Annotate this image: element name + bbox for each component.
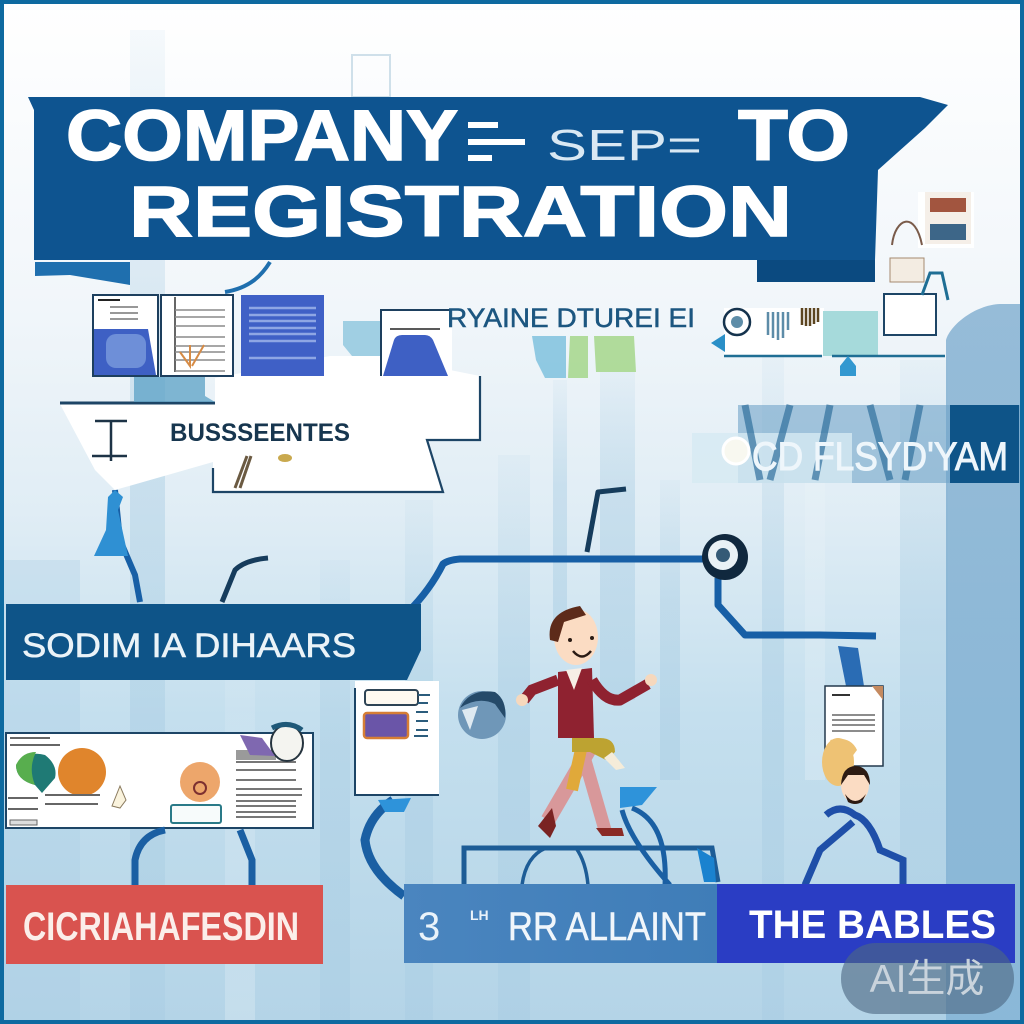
connectors below report — [135, 830, 252, 885]
panel: top right charts — [711, 273, 948, 376]
icon: folder card — [381, 310, 452, 376]
icon: small leaf — [278, 454, 292, 462]
icon: magnifier — [723, 438, 749, 464]
text lines — [236, 762, 302, 817]
legs — [548, 748, 590, 820]
icon: blue badge head — [458, 691, 506, 739]
connector: to document — [838, 646, 864, 686]
box: red — [6, 885, 323, 964]
icon: paper — [112, 786, 126, 808]
watermark text: AI生成 — [870, 958, 984, 1001]
arms — [524, 680, 558, 700]
title: first line: COMPANY — [66, 97, 458, 176]
right building silhouette — [946, 304, 1024, 1024]
sodim label: SODIM IA DIHAARS — [22, 627, 356, 665]
connector: up to business — [94, 490, 140, 602]
smile — [573, 651, 591, 656]
number three: 3 — [418, 905, 440, 949]
head — [554, 609, 598, 665]
watermark badge — [841, 943, 1014, 1014]
title dash — [468, 125, 525, 158]
panel: report left — [6, 724, 313, 828]
banner: mid-right — [692, 405, 1020, 483]
icon: person node — [180, 762, 220, 802]
icon: gauge node — [702, 534, 748, 580]
eyes — [568, 638, 572, 642]
icon: cyan and green bars — [532, 336, 636, 378]
box: royal blue — [717, 884, 1015, 963]
jacket — [558, 668, 594, 738]
character: walking man — [516, 606, 657, 838]
hatch marks — [768, 312, 788, 340]
process flow line — [408, 489, 876, 636]
connector: to bottom middle — [365, 798, 411, 896]
panel: small document — [355, 681, 439, 795]
shoes — [538, 808, 556, 838]
icon: green bubble — [16, 754, 56, 793]
cyan scrap — [343, 321, 380, 356]
shorts — [572, 738, 615, 760]
red box label: CICRIAHAFESDIN — [23, 905, 299, 949]
panel: sodim banner — [6, 604, 421, 680]
box: mid blue — [404, 884, 717, 963]
icon: blue document — [241, 295, 324, 376]
icon: ornament — [271, 725, 303, 761]
arrow: up — [840, 356, 856, 376]
title: second line: REGISTRATION — [129, 173, 792, 252]
bridge structure — [464, 787, 718, 888]
arrow: left — [711, 334, 725, 352]
document icons row — [93, 295, 452, 402]
icon: lined document — [161, 295, 233, 376]
small tag: LH — [470, 907, 489, 923]
icon: pencils — [235, 456, 251, 488]
icon: orange bubble — [58, 748, 106, 796]
title: to: TO — [738, 97, 850, 176]
heading: business: BUSSSEENTES — [170, 419, 350, 447]
icon: folder document — [93, 295, 158, 376]
stand below icons — [134, 377, 215, 402]
connector under banner — [225, 262, 270, 292]
panel: business — [60, 356, 480, 492]
character: man with document — [805, 738, 903, 885]
royal blue label: THE BABLES — [749, 903, 996, 947]
title: garbled step: SEP= — [547, 121, 702, 170]
mid blue label: RR ALLAINT — [508, 905, 706, 949]
top-right banner illustration — [890, 192, 974, 282]
collar — [566, 668, 582, 690]
icon: magnifier — [724, 309, 750, 335]
title banner — [28, 97, 948, 285]
panel: right document — [825, 686, 883, 766]
icon: T glyph — [92, 421, 127, 461]
connector: above sodium — [222, 558, 268, 602]
label: header dure: RYAINE DTUREI EI — [447, 303, 695, 333]
